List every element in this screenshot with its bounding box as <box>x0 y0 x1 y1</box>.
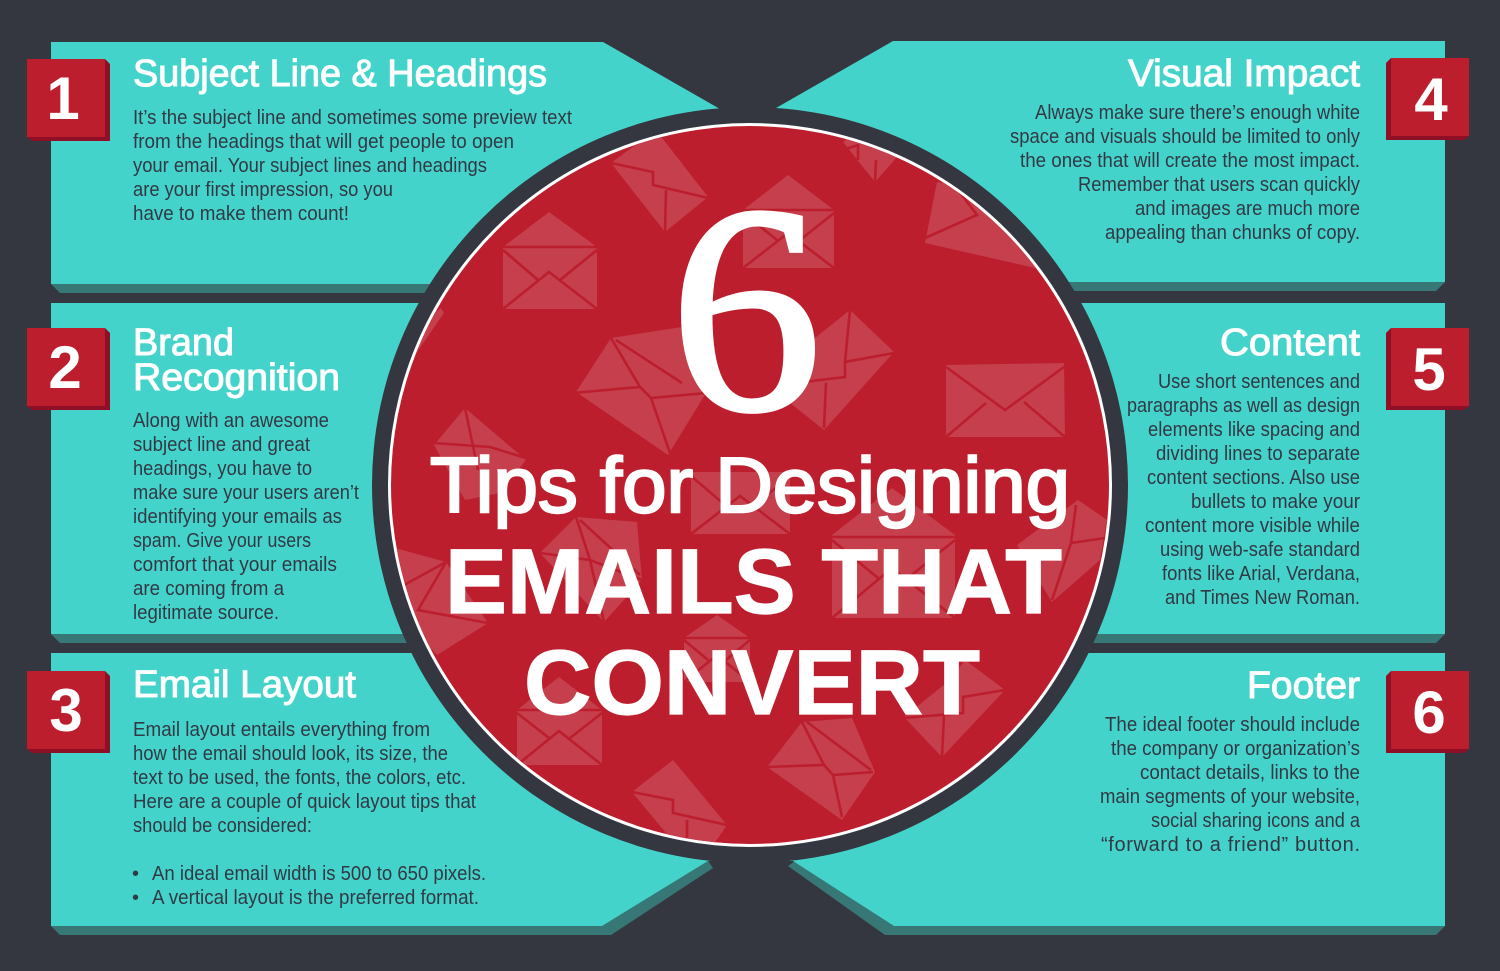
body: content: elements like spacing and <box>1148 419 1360 441</box>
body: brand recognition: are coming from a <box>133 578 285 600</box>
text: visual impact <box>1010 53 1360 244</box>
number badge 3: 3 <box>49 677 83 744</box>
heading: brand recognition <box>133 322 340 399</box>
body: brand recognition: comfort that your emails <box>133 554 337 576</box>
heading: content: Content <box>1220 322 1360 364</box>
body: brand recognition: identifying your emails as <box>133 506 342 528</box>
body: footer: social sharing icons and a <box>1151 810 1361 832</box>
body: content: fonts like Arial, Verdana, <box>1162 563 1360 585</box>
envelope pattern <box>395 130 1107 850</box>
body: visual impact: Always make sure there’s enough white <box>1035 102 1360 124</box>
body: email layout <box>132 719 486 909</box>
number badge 4 <box>1386 58 1469 140</box>
body: email layout: • <box>132 887 139 909</box>
panel: brand recognition shape <box>51 303 500 643</box>
body: subject line and headings: It’s the subject line and sometimes some preview text <box>133 107 572 129</box>
text: content <box>1127 322 1360 609</box>
body: content: content sections. Also use <box>1147 467 1360 489</box>
number badge 5: 5 <box>1412 336 1446 403</box>
body: footer <box>1100 714 1361 856</box>
body: subject line and headings: from the headings that will get people to open <box>133 131 514 153</box>
body: content: using web-safe standard <box>1160 539 1360 561</box>
number badge 1: 1 <box>46 65 80 132</box>
panel: subject line shape <box>51 42 720 293</box>
body: subject line and headings: are your first impression, so you <box>133 179 393 201</box>
body: visual impact: space and visuals should be limited to only <box>1010 126 1360 148</box>
body: brand recognition <box>133 410 359 624</box>
body: content: paragraphs as well as design <box>1127 395 1360 417</box>
body: brand recognition: spam. Give your users <box>133 530 311 552</box>
body: email layout: should be considered: <box>133 815 312 837</box>
body: email layout: Here are a couple of quick layout tips that <box>133 791 476 813</box>
number badge 6: 6 <box>1412 679 1446 746</box>
body: subject line and headings: have to make them count! <box>133 203 349 225</box>
body: footer: “forward to a friend” button. <box>1101 834 1360 856</box>
body: visual impact: appealing than chunks of copy. <box>1105 222 1360 244</box>
title: line 1: Tips for Designing <box>430 441 1070 529</box>
body: email layout: An ideal email width is 500 to 650 pixels. <box>152 863 486 885</box>
text: footer <box>1100 665 1361 856</box>
body: footer: contact details, links to the <box>1140 762 1360 784</box>
number badge 3 <box>27 671 110 753</box>
heading: visual impact: Visual Impact <box>1128 53 1360 95</box>
body: content: content more visible while <box>1145 515 1360 537</box>
text: email layout <box>132 664 486 909</box>
title <box>430 145 1070 734</box>
body: email layout: text to be used, the fonts, the colors, etc. <box>133 767 466 789</box>
number badge 2 <box>27 328 110 410</box>
body: brand recognition: headings, you have to <box>133 458 312 480</box>
body: brand recognition: Along with an awesome <box>133 410 329 432</box>
body: brand recognition: make sure your users aren’t <box>133 482 359 504</box>
panel: email layout shape <box>51 653 720 935</box>
text: brand recognition <box>133 322 359 624</box>
body: content: and Times New Roman. <box>1165 587 1360 609</box>
panel: footer shape <box>780 653 1445 935</box>
body: content: bullets to make your <box>1191 491 1360 513</box>
number badge 1 <box>27 59 110 141</box>
panel: visual impact shape <box>776 41 1445 291</box>
body: content: dividing lines to separate <box>1156 443 1360 465</box>
panel: content shape <box>1000 303 1445 643</box>
body: content: Use short sentences and <box>1158 371 1360 393</box>
body: footer: main segments of your website, <box>1100 786 1360 808</box>
heading: brand recognition: Brand <box>133 322 234 364</box>
body: footer: The ideal footer should include <box>1105 714 1360 736</box>
body: subject line and headings: your email. Your subject lines and headings <box>133 155 487 177</box>
body: email layout: • <box>132 863 139 885</box>
text: subject line and headings <box>133 53 572 225</box>
body: subject line and headings <box>133 107 572 225</box>
body: visual impact <box>1010 102 1360 244</box>
body: visual impact: the ones that will create the most impact. <box>1020 150 1360 172</box>
heading: email layout: Email Layout <box>133 664 356 706</box>
central circle <box>372 107 1128 863</box>
number badge 2: 2 <box>48 334 82 401</box>
body: content <box>1127 371 1360 609</box>
body: footer: the company or organization’s <box>1111 738 1360 760</box>
body: brand recognition: legitimate source. <box>133 602 279 624</box>
title: big numeral 6: 6 <box>670 145 822 474</box>
body: brand recognition: subject line and great <box>133 434 310 456</box>
number badge 6 <box>1386 671 1469 753</box>
number badge 5 <box>1386 328 1469 410</box>
title: line 3: CONVERT <box>524 632 980 734</box>
body: email layout: A vertical layout is the preferred format. <box>152 887 479 909</box>
heading: footer: Footer <box>1247 665 1360 707</box>
number badge 4: 4 <box>1414 66 1448 133</box>
heading: brand recognition: Recognition <box>133 357 340 399</box>
body: email layout: Email layout entails everything from <box>133 719 430 741</box>
body: email layout: how the email should look, its size, the <box>133 743 448 765</box>
title: line 2: EMAILS THAT <box>445 531 1062 633</box>
body: visual impact: and images are much more <box>1135 198 1360 220</box>
heading: subject line and headings: Subject Line & Headings <box>133 53 547 95</box>
body: visual impact: Remember that users scan quickly <box>1078 174 1360 196</box>
